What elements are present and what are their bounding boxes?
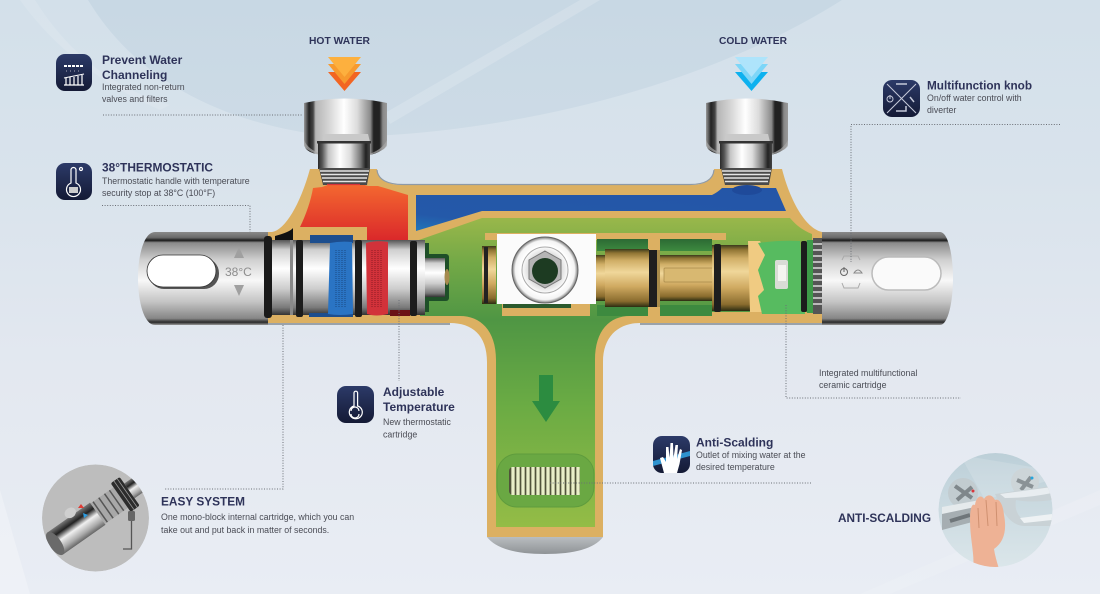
description: Thermostatic handle with temperature	[102, 176, 250, 186]
heading: Prevent Water	[102, 53, 183, 67]
valve body cutaway	[268, 169, 822, 554]
photo: hand on mixer	[938, 453, 1052, 569]
outlet filter	[497, 454, 594, 507]
heading: Adjustable	[383, 385, 445, 399]
photo: cartridge	[42, 464, 149, 572]
heading: EASY SYSTEM	[161, 494, 245, 508]
icon: multifunction	[883, 80, 920, 117]
feature: prevent water channeling	[56, 53, 185, 104]
feature: easy system	[38, 462, 354, 572]
feature: multifunction knob	[883, 78, 1032, 117]
icon: up arrow	[234, 247, 244, 258]
thermostatic cartridge	[264, 228, 450, 318]
outlet base	[487, 537, 603, 554]
feature: anti-scalding photo	[838, 453, 1052, 569]
description line 2: take out and put back in matter of seconds.	[161, 525, 329, 535]
description: New thermostatic	[383, 417, 452, 427]
icon: hand with water band	[653, 436, 690, 473]
leader lines	[102, 115, 1060, 489]
description line 2: ceramic cartridge	[819, 380, 887, 390]
hot connector thread	[319, 168, 370, 185]
description line 2: cartridge	[383, 430, 417, 440]
band: blue seal	[328, 242, 353, 315]
ceramic cartridge	[748, 238, 822, 314]
heading: ANTI-SCALDING	[838, 511, 931, 525]
description: On/off water control with	[927, 93, 1022, 103]
icon: knob grip	[872, 257, 941, 290]
chamber: cold water	[416, 188, 786, 231]
icon: water channeling	[56, 54, 92, 91]
left thermostatic handle	[138, 232, 268, 325]
band: red seal	[366, 241, 388, 316]
chamber: hot water	[300, 182, 408, 243]
hot water connector	[304, 98, 387, 172]
icon: adjustable thermometer	[337, 386, 374, 423]
label: hot water: HOT WATER	[309, 36, 371, 47]
heading: Multifunction knob	[927, 78, 1032, 92]
heading line 2: Channeling	[102, 68, 167, 82]
valve block	[497, 234, 596, 304]
icon: power and shower symbols	[840, 256, 862, 288]
description line 2: diverter	[927, 105, 956, 115]
cold connector thread	[721, 168, 772, 195]
label: 38 degrees: 38°C	[225, 265, 252, 279]
heading line 2: Temperature	[383, 400, 455, 414]
icon: handle grip	[147, 255, 219, 289]
mixing cartridge	[482, 233, 812, 317]
feature: anti-scalding outlet	[653, 436, 806, 473]
description: One mono-block internal cartridge, which you can	[161, 512, 354, 522]
cold water connector	[706, 98, 788, 172]
icon: down arrow	[234, 285, 244, 296]
description line 2: desired temperature	[696, 462, 775, 472]
chamber: mixed water	[416, 218, 812, 527]
arrow: hot water chevrons	[328, 57, 361, 91]
note: ceramic cartridge	[819, 368, 917, 390]
arrow: cold water chevrons	[735, 57, 768, 91]
description line 2: security stop at 38°C (100°F)	[102, 188, 215, 198]
feature: adjustable temperature	[337, 385, 455, 440]
description line 2: valves and filters	[102, 94, 168, 104]
right multifunction knob	[822, 232, 953, 325]
description: Outlet of mixing water at the	[696, 450, 806, 460]
arrow: mixed water flow	[532, 375, 560, 422]
description: Integrated non-return	[102, 82, 185, 92]
heading: 38°THERMOSTATIC	[102, 160, 213, 174]
label: cold water: COLD WATER	[719, 36, 788, 47]
feature: 38 thermostatic	[56, 160, 250, 200]
icon: thermometer	[56, 163, 92, 200]
description: Integrated multifunctional	[819, 368, 917, 378]
heading: Anti-Scalding	[696, 436, 773, 450]
